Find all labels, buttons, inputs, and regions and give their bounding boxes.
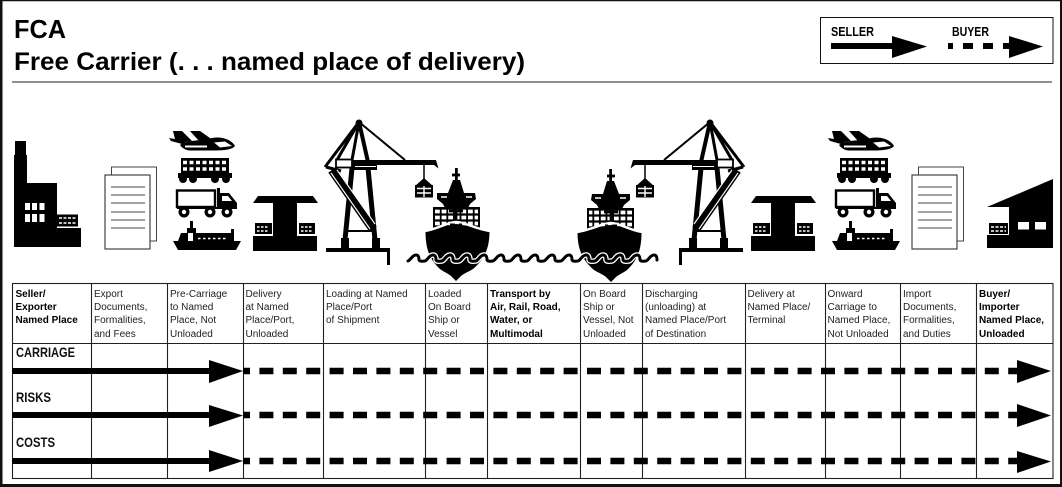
icon: container ship at destination — [577, 169, 642, 282]
header: pre-carriage: Place, Not — [170, 315, 216, 326]
header: seller: Seller/ — [16, 289, 46, 300]
icon: import documents — [912, 167, 964, 249]
header: import documents: Documents, — [903, 302, 956, 313]
row: risks — [12, 389, 1051, 427]
header: delivery at named place: Delivery — [246, 289, 282, 300]
header: export documents: Export — [94, 289, 123, 300]
title: FCA — [14, 14, 66, 44]
header: transport: Multimodal — [490, 329, 543, 340]
header: import documents: Formalities, — [903, 315, 955, 326]
header: pre-carriage: Unloaded — [170, 329, 213, 340]
icon: origin terminal — [253, 196, 318, 251]
header: loaded on board: On Board — [428, 302, 471, 313]
header: on board: Ship or — [583, 302, 615, 313]
header: loaded on board: Loaded — [428, 289, 461, 300]
header: onward carriage: Onward — [828, 289, 863, 300]
header: delivery at terminal: Named Place/ — [748, 302, 811, 313]
header: delivery at terminal: Delivery at — [748, 289, 795, 300]
icon: crane at port of shipment — [325, 120, 438, 265]
header: transport: Water, or — [490, 315, 533, 326]
header: transport: Transport by — [490, 289, 551, 300]
header: export documents: Documents, — [94, 302, 147, 313]
header: onward carriage: Not Unloaded — [828, 329, 889, 340]
header: transport: Air, Rail, Road, — [490, 302, 561, 313]
header: seller: Named Place — [16, 315, 78, 326]
header: loaded on board: Vessel — [428, 329, 457, 340]
icon: crane at port of destination — [630, 120, 744, 265]
legend: seller and buyer arrows: BUYER — [952, 24, 989, 39]
header: buyer: Unloaded — [979, 329, 1025, 340]
header: discharging: (unloading) at — [645, 302, 706, 313]
header: onward carriage: Named Place, — [828, 315, 890, 326]
legend: seller and buyer arrows — [820, 18, 1053, 64]
header: pre-carriage: Pre-Carriage — [170, 289, 228, 300]
column headers — [16, 289, 1044, 340]
title — [14, 14, 525, 76]
row: carriage — [12, 344, 1051, 383]
header: onward carriage: Carriage to — [828, 302, 877, 313]
header: loading: of Shipment — [326, 315, 380, 326]
header: loading: Loading at Named — [326, 289, 408, 300]
header: delivery at named place: at Named — [246, 302, 289, 313]
header: loaded on board: Ship or — [428, 315, 460, 326]
header: import documents: Import — [903, 289, 932, 300]
header: discharging: Discharging — [645, 289, 698, 300]
header: pre-carriage: to Named — [170, 302, 213, 313]
icon: container ship at origin — [425, 168, 490, 281]
header: export documents: Formalities, — [94, 315, 146, 326]
title: Free Carrier (. . . named place of delivery) — [14, 48, 525, 76]
header: seller: Exporter — [16, 302, 57, 313]
icon: destination terminal — [751, 196, 816, 251]
icon: pre-carriage transport modes — [169, 131, 241, 250]
header: delivery at named place: Unloaded — [246, 329, 288, 340]
header: on board: Vessel, Not — [583, 315, 634, 326]
icon: export documents — [105, 167, 156, 249]
header: on board: On Board — [583, 289, 626, 300]
row: carriage: CARRIAGE — [16, 344, 75, 360]
header: delivery at terminal: Terminal — [748, 315, 785, 326]
row: costs: COSTS — [16, 434, 55, 450]
header: delivery at named place: Place/Port, — [246, 315, 294, 326]
header: discharging: of Destination — [645, 329, 706, 340]
icon: sea waves — [408, 255, 657, 261]
header: on board: Unloaded — [583, 329, 626, 340]
header: import documents: and Duties — [903, 329, 951, 340]
table grid — [12, 283, 1053, 478]
header: export documents: and Fees — [94, 329, 136, 340]
header: buyer: Importer — [979, 302, 1020, 313]
row: risks: RISKS — [16, 389, 51, 405]
header: loading: Place/Port — [326, 302, 372, 313]
icon: onward carriage transport modes — [828, 131, 900, 250]
icon: buyer warehouse — [987, 179, 1053, 248]
row: costs — [12, 434, 1051, 473]
header: discharging: Named Place/Port — [645, 315, 726, 326]
header: buyer: Buyer/ — [979, 289, 1010, 300]
legend: seller and buyer arrows: SELLER — [831, 24, 875, 39]
icon: factory — [14, 141, 81, 247]
header: buyer: Named Place, — [979, 315, 1044, 326]
